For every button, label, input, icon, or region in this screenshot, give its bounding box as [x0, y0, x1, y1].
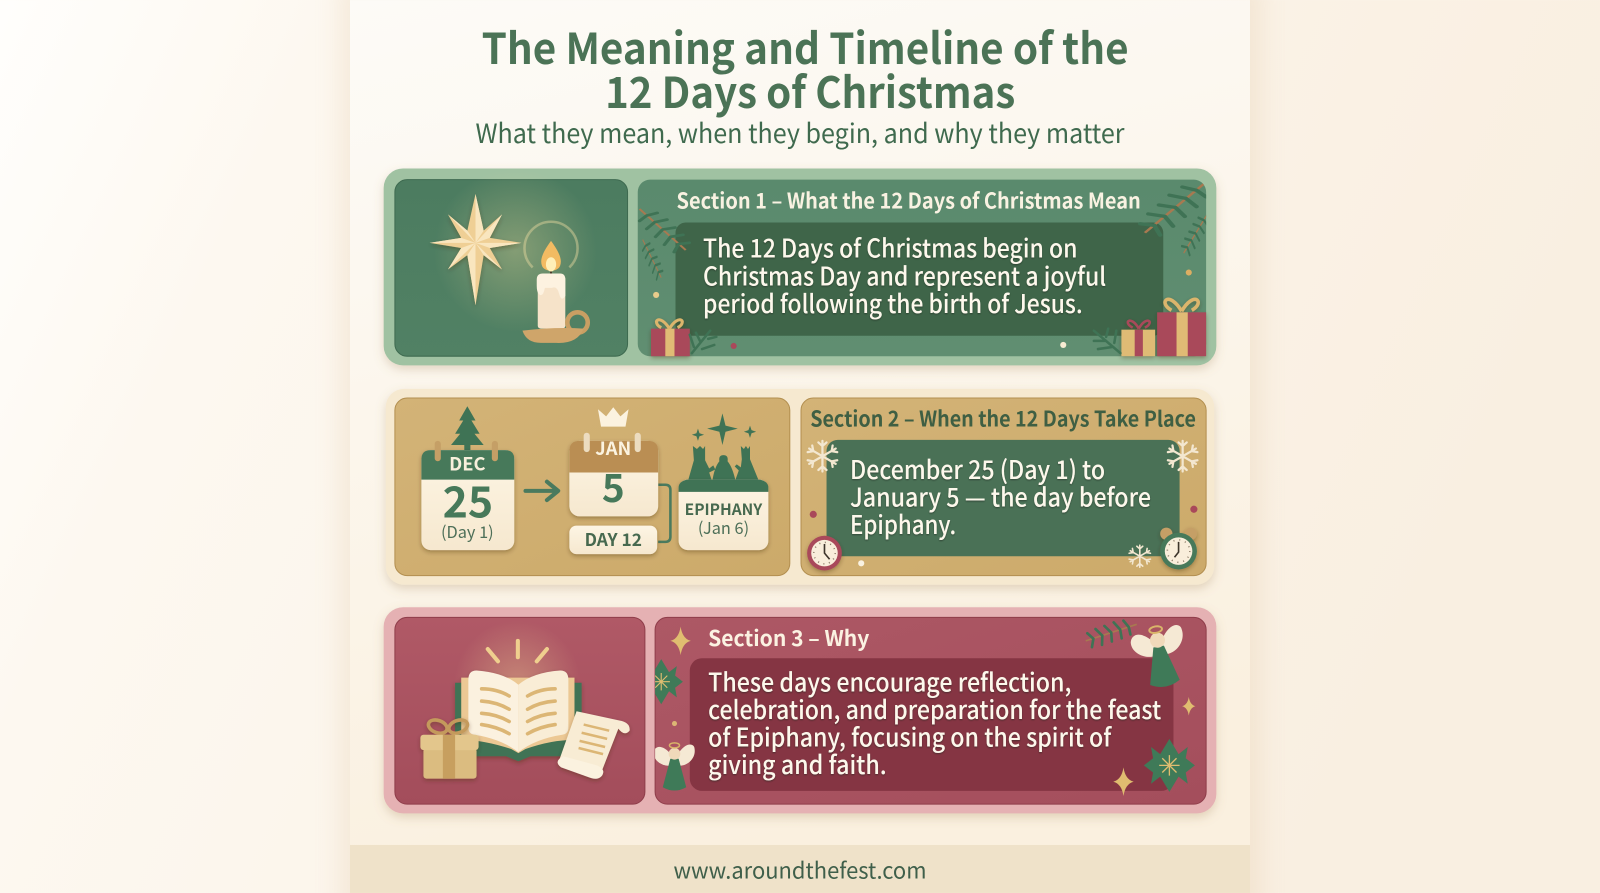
icon: rays [488, 641, 547, 661]
panel: section 3 [384, 605, 1216, 813]
calendar: jan 5: 5 [602, 458, 625, 514]
icon: candle [522, 222, 588, 343]
body text [850, 450, 1151, 542]
body text [703, 229, 1106, 321]
right card [638, 180, 1208, 356]
body text: Christmas Day and represent a joyful [703, 256, 1106, 293]
calendar: jan 5: JAN [595, 435, 631, 461]
icon: open book [455, 670, 582, 761]
body text [708, 662, 1161, 782]
calendar: dec 25 [421, 441, 514, 550]
body text: January 5 — the day before [850, 478, 1151, 515]
body text: The 12 Days of Christmas begin on [703, 229, 1078, 266]
bracket [658, 485, 670, 542]
body text: Epiphany. [850, 505, 956, 542]
body text: of Epiphany, focusing on the spirit of [708, 718, 1112, 755]
centre sheet [350, 0, 1250, 893]
body text: December 25 (Day 1) to [850, 450, 1105, 487]
icon: sparkles [670, 627, 1195, 796]
icon: alarm clock green [1160, 528, 1197, 569]
icon: crown [598, 407, 629, 427]
calendar: jan 5 [569, 433, 658, 516]
icon: snowflakes [808, 441, 1197, 567]
card: epiphany: (Jan 6) [698, 515, 749, 539]
footer band [350, 845, 1250, 893]
section heading: Section 1 – What the 12 Days of Christmas Mean [677, 185, 1141, 216]
pine bottom sprigs [690, 329, 1120, 353]
icon: star [430, 194, 521, 305]
title [482, 15, 1129, 121]
left card: book, gift, scroll [395, 617, 645, 804]
footer url: www.aroundthefest.com [673, 854, 927, 886]
icon: gifts right [1121, 299, 1206, 356]
left card: star and candle [395, 168, 628, 356]
icon: tree [451, 406, 484, 451]
body text: giving and faith. [708, 745, 887, 782]
dots [653, 269, 1192, 349]
icon: pine branches [640, 182, 1208, 279]
arrow [526, 482, 558, 500]
right card [801, 398, 1206, 576]
text box [690, 658, 1173, 791]
section heading: Section 3 – Why [708, 622, 869, 653]
label: day 12 [569, 526, 657, 554]
calendar: dec 25: 25 [443, 468, 493, 530]
calendar: dec 25: (Day 1) [441, 519, 494, 543]
label: day 12: DAY 12 [585, 526, 642, 551]
calendar: dec 25: DEC [449, 450, 486, 476]
panel: section 2 [386, 389, 1214, 585]
icon: angels [654, 622, 1191, 791]
panel: section 1 [384, 168, 1216, 365]
icon: gift left [651, 320, 690, 356]
subtitle: What they mean, when they begin, and why they matter [476, 112, 1125, 151]
body text: celebration, and preparation for the feast [708, 690, 1161, 727]
card: epiphany: EPIPHANY [685, 498, 762, 520]
title: 12 Days of Christmas [605, 59, 1015, 121]
icon: gift [420, 718, 479, 779]
right card [640, 605, 1206, 804]
section heading: Section 2 – When the 12 Days Take Place [810, 403, 1196, 434]
icon: scroll [558, 711, 630, 779]
body text: period following the birth of Jesus. [703, 284, 1083, 321]
icon: clock red [807, 536, 842, 570]
icon: poinsettias [640, 659, 1195, 792]
dots [810, 506, 1197, 566]
icon: star and kings [688, 413, 759, 482]
text box [676, 223, 1163, 336]
body text: These days encourage reflection, [708, 662, 1071, 699]
text box [827, 440, 1180, 556]
icon: pine sprig [1086, 619, 1137, 648]
title: The Meaning and Timeline of the [482, 15, 1129, 77]
card: epiphany [679, 413, 768, 550]
left card: timeline [395, 398, 790, 576]
